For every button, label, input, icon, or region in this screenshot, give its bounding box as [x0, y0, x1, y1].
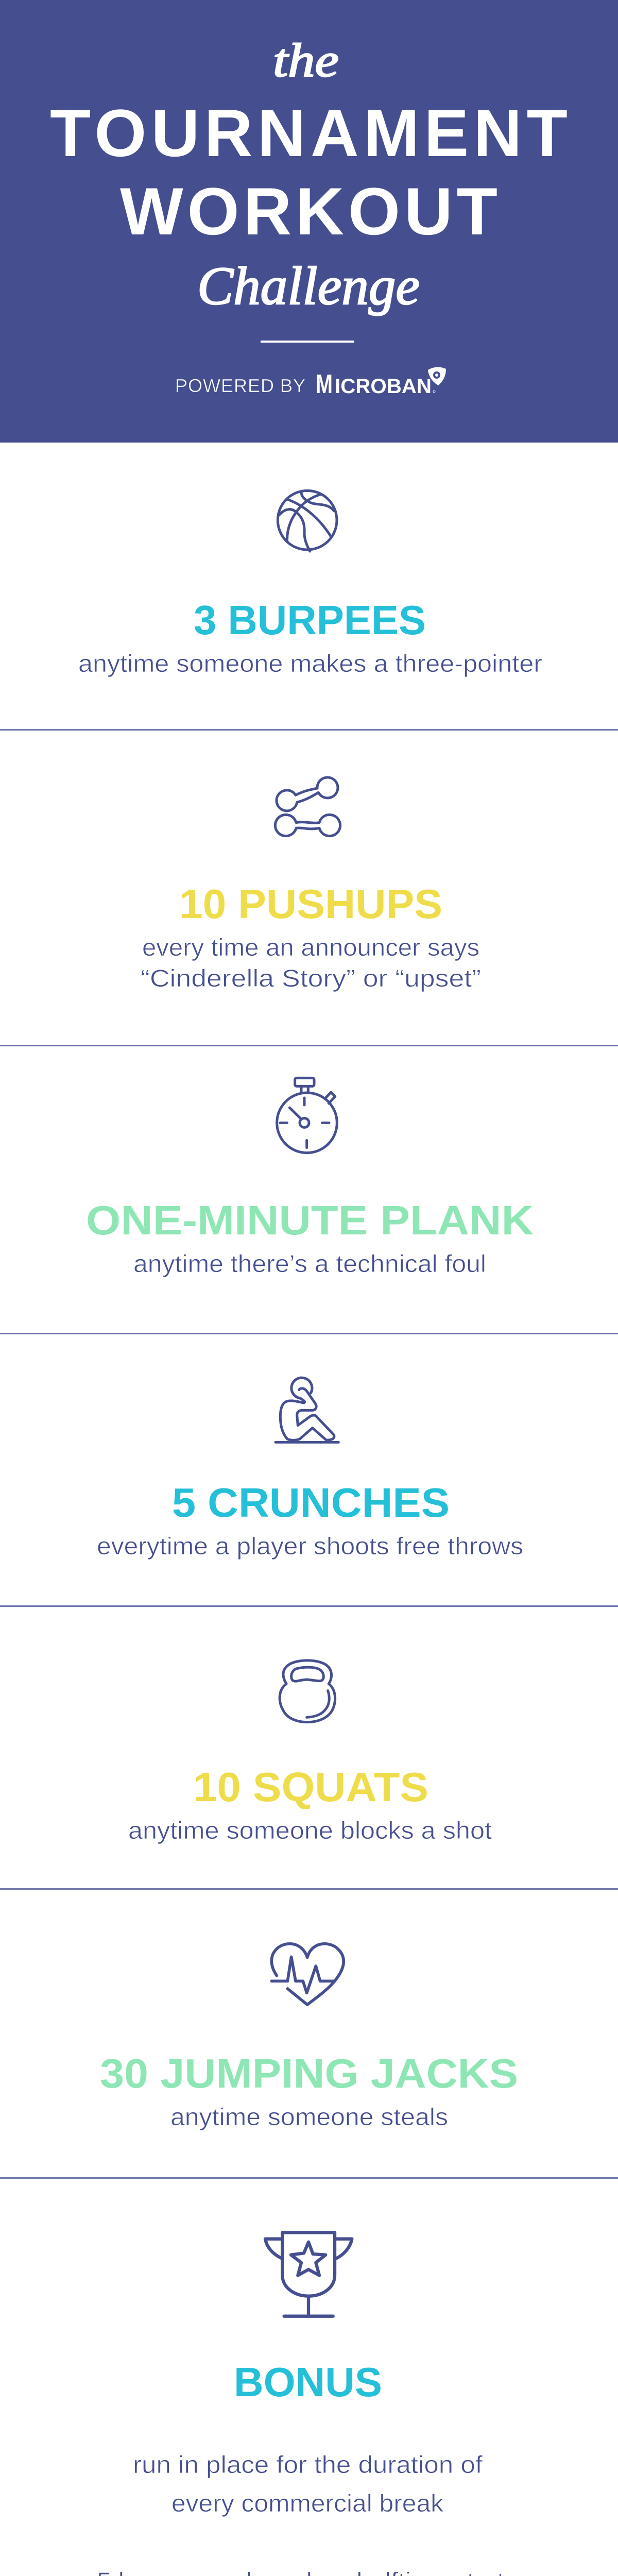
powered by label: POWERED BY — [175, 375, 305, 396]
heading: ONE-MINUTE PLANK — [86, 1197, 534, 1243]
panel: 10 pushups — [141, 777, 481, 992]
panel: 10 squats — [128, 1660, 492, 1844]
description: every time an announcer says — [142, 934, 479, 961]
description: anytime someone makes a three-pointer — [78, 650, 542, 677]
icon: stopwatch — [277, 1078, 337, 1153]
icon: basketball — [278, 490, 337, 551]
bonus item: run in place — [133, 2451, 483, 2517]
heading: 5 CRUNCHES — [172, 1480, 450, 1526]
icon: microban shield — [428, 367, 446, 393]
icon: heart with pulse — [271, 1944, 344, 2005]
title line: workout: WORKOUT — [120, 174, 497, 249]
panel: 3 burpees — [78, 490, 542, 677]
script word: challenge: Challenge — [197, 256, 420, 316]
heading: 10 SQUATS — [193, 1764, 428, 1810]
panel: one-minute plank — [86, 1078, 534, 1277]
description: “Cinderella Story” or “upset” — [141, 964, 481, 992]
bonus item: run in place: every commercial break — [171, 2489, 444, 2517]
bonus item: run in place: run in place for the duration of — [133, 2451, 483, 2478]
title line: tournament: TOURNAMENT — [50, 95, 568, 171]
description — [141, 934, 481, 992]
microban wordmark: ICROBAN — [335, 375, 432, 398]
panel: bonus — [97, 2232, 517, 2576]
script word: the: the — [273, 34, 339, 87]
description: anytime someone steals — [170, 2103, 448, 2130]
icon: kettlebell — [280, 1660, 335, 1722]
icon: dumbbells — [275, 777, 340, 836]
header panel — [0, 0, 618, 443]
description: anytime there’s a technical foul — [133, 1250, 486, 1277]
header background — [0, 0, 618, 443]
panel: 30 jumping jacks — [100, 1944, 518, 2130]
panel: 5 crunches — [97, 1378, 523, 1560]
heading: 30 JUMPING JACKS — [100, 2050, 518, 2096]
header rule — [261, 341, 354, 343]
description: anytime someone blocks a shot — [128, 1817, 492, 1844]
icon: trophy with star — [265, 2232, 352, 2316]
heading: 10 PUSHUPS — [179, 881, 442, 927]
heading: BONUS — [234, 2359, 382, 2405]
icon: person doing crunch — [276, 1378, 338, 1442]
heading: 3 BURPEES — [194, 597, 426, 643]
description: everytime a player shoots free throws — [97, 1532, 523, 1560]
microban wordmark: M — [316, 369, 333, 399]
